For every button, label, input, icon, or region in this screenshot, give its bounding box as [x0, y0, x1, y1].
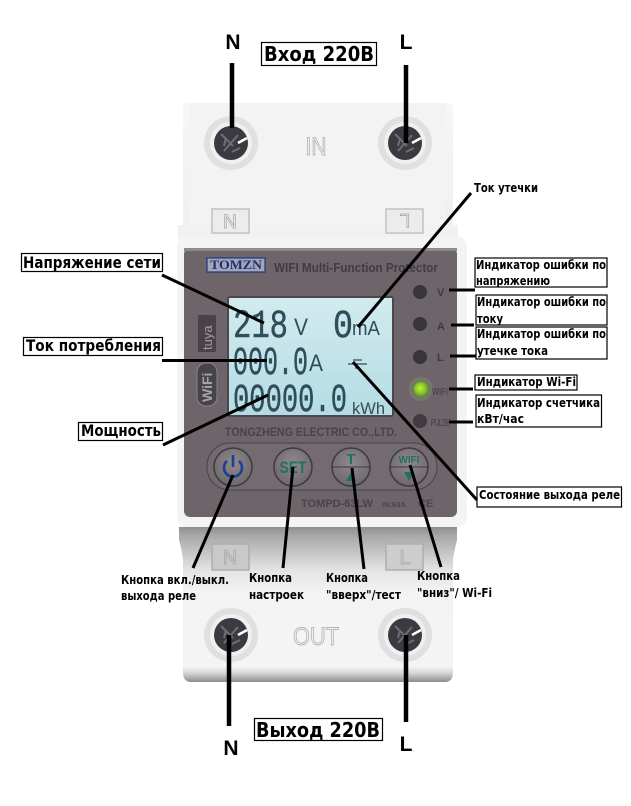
screw: bottom right — [378, 608, 432, 662]
LCD screen — [227, 296, 394, 424]
callout: kWh meter indicator: Индикатор счетчика — [477, 395, 600, 410]
label: down button: "вниз"/ Wi-Fi — [417, 586, 492, 600]
callout: leakage current: Ток утечки — [474, 180, 538, 195]
arrow: power — [163, 395, 268, 445]
terminal tag L top — [386, 209, 423, 233]
screw: bottom left — [204, 608, 258, 662]
relay state symbol — [348, 360, 367, 368]
brand logo TOMZN: TOMZN — [210, 257, 263, 272]
set button: SET — [280, 458, 307, 477]
callout: current error indicator: току — [477, 311, 503, 326]
callout: mains voltage: Напряжение сети — [23, 253, 161, 272]
arrow: mains voltage — [162, 275, 264, 323]
arrow: voltage error — [449, 288, 475, 292]
arrow: current error — [451, 324, 474, 326]
callout: load current: Ток потребления — [26, 336, 161, 355]
callout: leakage error indicator: утечке тока — [477, 343, 548, 358]
indicators: V — [437, 287, 445, 299]
LCD screen: V — [294, 314, 308, 341]
label: N top: N — [225, 31, 241, 54]
voltage reading: 218 — [233, 305, 288, 350]
label: set button: настроек — [249, 588, 304, 602]
label: L top: L — [400, 31, 413, 54]
arrow: kWh meter — [449, 420, 473, 424]
arrow: up button — [352, 468, 364, 569]
arrow: power button — [193, 475, 233, 568]
terminal tag N top — [212, 209, 249, 233]
callout: kWh meter indicator — [476, 395, 602, 427]
heading: output 220V: Выход 220В — [256, 718, 380, 742]
manufacturer text: TONGZHENG ELECTRIC CO.,LTD. — [225, 425, 397, 439]
label: power button — [121, 573, 229, 603]
indicators: PULSE — [431, 418, 450, 429]
power button — [214, 448, 252, 486]
arrow: set button — [283, 467, 293, 568]
screw: top left — [204, 116, 258, 170]
label: power button: Кнопка вкл./выкл. — [121, 573, 229, 587]
arrow: load current — [162, 359, 267, 362]
button group — [207, 443, 437, 490]
wire: top L — [404, 65, 408, 143]
wire: bottom N — [227, 635, 231, 726]
embossed IN: IN — [306, 133, 326, 161]
power reading: 00000.0 — [233, 379, 347, 424]
heading: input 220V: Вход 220В — [264, 42, 374, 66]
arrow: down button — [410, 465, 441, 567]
embossed OUT: OUT — [293, 623, 339, 651]
terminal tag N top: N — [223, 212, 237, 233]
terminal tag N bottom — [212, 544, 249, 570]
product title: WIFI Multi-Function Protector — [274, 260, 438, 275]
callout: power: Мощность — [81, 421, 161, 440]
arrow: leakage error — [450, 354, 476, 358]
arrow: leakage current — [358, 193, 471, 327]
terminal tag L top: L — [400, 209, 410, 230]
arrow: relay state — [353, 362, 477, 500]
wifi down button — [390, 448, 428, 486]
screw: top right — [378, 116, 432, 170]
label: N bottom: N — [223, 737, 239, 760]
label: set button — [249, 571, 304, 602]
current reading: 000.0 — [233, 342, 308, 387]
arrow: wifi indicator — [449, 388, 473, 390]
wifi badge — [197, 363, 217, 406]
label: down button: Кнопка — [417, 569, 460, 583]
indicators — [409, 285, 450, 429]
model text: CE — [418, 498, 433, 510]
LCD screen: A — [309, 350, 323, 377]
wifi down button: WIFI — [398, 455, 420, 466]
test up button — [332, 448, 370, 486]
indicators: L — [437, 352, 444, 364]
set button — [274, 448, 312, 486]
LCD screen: kWh — [352, 399, 385, 418]
model text — [301, 498, 433, 510]
LCD screen: mA — [352, 318, 381, 340]
callout: wifi indicator: Индикатор Wi-Fi — [477, 374, 576, 389]
callout: leakage error indicator — [476, 326, 607, 359]
tuya badge — [198, 315, 216, 352]
test up button: T — [346, 451, 356, 468]
wifi badge: WiFi — [199, 373, 215, 402]
terminal tag L bottom — [386, 544, 423, 570]
callout: voltage error indicator: напряжению — [476, 273, 550, 288]
label: up button — [326, 571, 401, 602]
indicators: A — [437, 321, 445, 333]
wire: bottom L — [404, 635, 408, 722]
label: power button: выхода реле — [121, 589, 196, 603]
label: down button — [417, 569, 492, 600]
label: L bottom: L — [400, 733, 413, 756]
terminal tag L bottom: L — [399, 547, 411, 569]
label: up button: Кнопка — [326, 571, 368, 585]
indicators: WIFI — [432, 387, 448, 398]
model text: TOMPD-63LW — [301, 498, 374, 510]
callout: current error indicator — [476, 294, 607, 326]
wire: top N — [230, 63, 234, 128]
label: up button: "вверх"/тест — [326, 588, 401, 602]
terminal tag N bottom: N — [223, 547, 237, 569]
device body — [177, 103, 467, 682]
callout: kWh meter indicator: кВт/час — [477, 411, 524, 426]
callout: voltage error indicator — [475, 257, 607, 288]
leakage reading: 0 — [333, 305, 353, 350]
panel: front panel — [184, 248, 457, 517]
model text: IN:63A — [382, 500, 406, 509]
label: set button: Кнопка — [249, 571, 292, 585]
tuya badge: tuya — [200, 325, 215, 350]
